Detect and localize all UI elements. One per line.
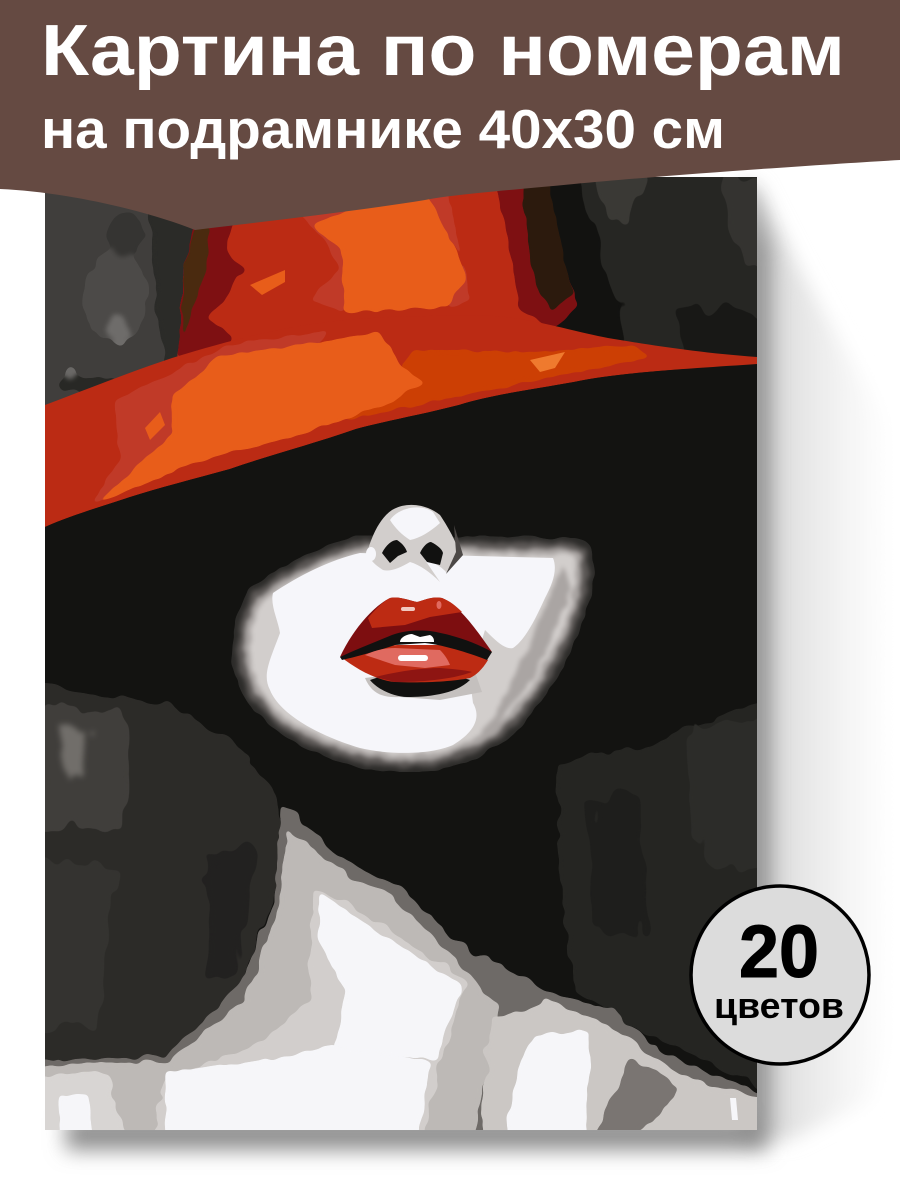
- right shoulder light: [481, 998, 757, 1130]
- crown lighter red: [303, 212, 345, 311]
- lips: [340, 597, 492, 700]
- hair left: [45, 683, 281, 1062]
- hat brim: [45, 316, 757, 527]
- brim orange: [95, 333, 425, 505]
- face: [250, 552, 576, 755]
- canvas drop shadow: [66, 185, 900, 1150]
- lower lip shadow: [370, 678, 470, 697]
- badge label: цветов: [714, 985, 844, 1026]
- chest white: [155, 890, 468, 1130]
- painting background: [45, 370, 670, 527]
- badge number: 20: [739, 910, 819, 993]
- painting canvas: [20, 170, 780, 1160]
- mid grey: [45, 831, 499, 1130]
- background top left: [45, 193, 193, 405]
- upper lip: [340, 597, 492, 657]
- face highlight: [267, 553, 555, 753]
- mouth line: [340, 630, 492, 660]
- lip highlights: [365, 648, 450, 668]
- hat crown: [178, 180, 578, 360]
- title: Картина по номерам: [41, 11, 845, 91]
- nostrils: [382, 540, 407, 563]
- hat shadow: [45, 364, 757, 527]
- crown dark left: [178, 218, 245, 357]
- crown dark right: [496, 180, 578, 328]
- title banner: [0, 0, 900, 230]
- subtitle: на подрамнике 40х30 см: [41, 98, 725, 160]
- brim right dark orange: [348, 346, 647, 420]
- crown orange band: [313, 192, 465, 313]
- lower lip: [341, 645, 488, 682]
- outer grey: [45, 806, 757, 1130]
- brim lighter red: [90, 330, 330, 505]
- background top right: [581, 177, 757, 350]
- nose: [366, 505, 463, 582]
- hair right: [556, 704, 757, 1089]
- neck and shoulders: [45, 806, 757, 1130]
- badge: 20 colours: [691, 886, 869, 1064]
